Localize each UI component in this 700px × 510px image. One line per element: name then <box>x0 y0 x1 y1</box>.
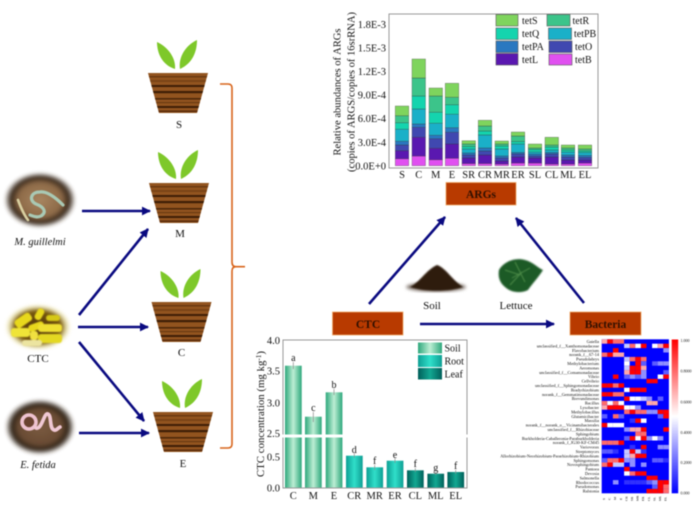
icon: M. guillelmi earthworm photo <box>4 172 76 228</box>
legend: Leaf <box>444 370 463 380</box>
column labels: MR <box>636 495 640 501</box>
x axis labels: CR <box>347 491 361 502</box>
significance letters: f <box>373 456 377 467</box>
colour scale bar: 0.8000 <box>680 368 692 374</box>
x axis labels: MR <box>494 170 510 181</box>
row labels: Pseudomonas <box>575 484 599 489</box>
chart: bacteria heatmap <box>500 338 692 501</box>
x axis labels <box>290 491 462 502</box>
legend: Soil <box>444 344 461 354</box>
column labels: ER <box>641 496 645 501</box>
row labels: Vibrio <box>588 374 599 379</box>
box: Bacteria: Bacteria <box>585 319 626 331</box>
row labels: Gaiella <box>587 339 599 344</box>
x axis labels: ML <box>560 170 576 181</box>
y axis labels: 0.5 <box>267 452 280 464</box>
row labels: norank_f__Gemmatimonadaceae <box>542 392 599 397</box>
row labels: Flavobacterium <box>572 348 600 353</box>
y axis title: ) <box>256 350 267 355</box>
legend: tetL <box>522 55 538 66</box>
arrow: CTC to pot C <box>78 326 148 328</box>
significance letters <box>291 353 458 474</box>
row labels: Variovorax <box>580 445 600 450</box>
arrow: CTC to ARGs <box>369 217 445 304</box>
axes frame <box>283 340 467 488</box>
row labels: Allorhizobium-Neorhizobium-Pararhizobium-Rhizobium <box>500 453 600 458</box>
row labels <box>500 339 600 494</box>
heatmap cells <box>602 339 669 493</box>
plot frame <box>389 14 598 168</box>
x axis labels: E <box>331 491 337 502</box>
row labels: Ralstonia <box>583 489 599 494</box>
x axis labels: E <box>449 170 455 181</box>
row labels: unclassified_f__Sphingomonadaceae <box>535 383 599 388</box>
y axis labels: 0.0E+0 <box>355 162 386 172</box>
x axis labels: S <box>399 170 405 181</box>
y axis title: CTC concentration (mg kg <box>256 364 267 477</box>
x axis labels: C <box>415 170 422 181</box>
box: ARGs: ARGs <box>466 189 497 201</box>
row labels: Methylobacillus <box>571 409 599 414</box>
column labels: CR <box>624 496 628 501</box>
row labels: Aeromonas <box>579 365 599 370</box>
stacked bars <box>395 59 592 166</box>
icon: E. fetida earthworm photo <box>5 399 75 455</box>
legend: tetQ <box>522 29 540 40</box>
box: Bacteria <box>570 312 641 335</box>
label: CTC: CTC <box>27 353 49 365</box>
y axis labels: 3.0E-4 <box>358 138 387 149</box>
legend: Root <box>444 356 464 368</box>
row labels: Cellvibrio <box>582 379 599 384</box>
row labels: Bradyrhizobium <box>571 387 600 392</box>
row labels: unclassified_f__Rhizobiaceae <box>547 427 599 432</box>
legend: tetS <box>522 16 538 27</box>
y axis title: Relative abundances of ARGs <box>332 28 344 156</box>
error bars <box>293 362 456 475</box>
x axis labels: CR <box>478 170 492 181</box>
x axis labels: ER <box>511 170 525 181</box>
row labels: Burkholderia-Caballeronia-Paraburkholderia <box>522 436 599 441</box>
label: S: S <box>176 119 182 131</box>
y axis labels: 3.5 <box>267 366 280 378</box>
row labels: Streptomyces <box>576 449 599 454</box>
row labels: Rhodococcus <box>576 480 599 485</box>
icon: plant pot E <box>153 379 213 452</box>
column labels <box>602 495 668 501</box>
row labels: Glutamicibacter <box>571 414 600 419</box>
x axis labels: C <box>290 491 297 502</box>
label: C: C <box>178 347 185 359</box>
y axis title <box>332 12 358 172</box>
icon: lettuce <box>499 259 543 292</box>
arrow: CTC to pot M <box>79 229 148 315</box>
column labels: SL <box>652 497 656 501</box>
row labels: Salmonella <box>580 475 599 480</box>
column labels: C <box>608 497 612 500</box>
column labels: CL <box>647 497 651 501</box>
colour scale bar: 0.000 <box>680 490 690 496</box>
significance letters: d <box>352 445 357 456</box>
row labels: Methylobacterium <box>567 361 600 366</box>
y axis labels: 0.0 <box>267 484 280 494</box>
x axis labels: CL <box>409 491 422 502</box>
row labels: Sphingobium <box>576 431 600 436</box>
legend: tetR <box>572 16 589 27</box>
label: Soil: Soil <box>423 300 441 312</box>
legend: tetPA <box>522 42 545 53</box>
row labels: unclassified_f__Xanthomonadaceae <box>537 343 599 348</box>
column labels: SR <box>630 496 634 501</box>
x axis labels: M <box>431 170 441 181</box>
significance letters: g <box>433 463 438 474</box>
column labels: ML <box>658 496 662 501</box>
label: E: E <box>180 458 187 470</box>
y axis labels: 1.8E-3 <box>358 20 386 31</box>
row labels: norank_f__67-14 <box>569 352 600 357</box>
row labels: Lysobacter <box>580 405 600 410</box>
arrow: E. fetida to pot E <box>79 432 149 434</box>
y axis labels: 3.0 <box>267 398 280 410</box>
label: M. guillelmi: M. guillelmi <box>13 237 66 248</box>
significance letters: a <box>291 353 296 364</box>
colour scale bar: 0.4000 <box>680 430 692 435</box>
row labels: Massilia <box>584 418 599 423</box>
row labels: Sphingomonas <box>573 458 599 463</box>
legend: tetO <box>575 42 592 53</box>
box: CTC: CTC <box>356 319 380 331</box>
x axis labels <box>399 170 591 181</box>
significance letters: b <box>332 380 336 391</box>
label: Lettuce: Lettuce <box>500 300 533 312</box>
x axis labels: MR <box>367 491 383 502</box>
column labels: E <box>619 498 623 500</box>
colour scale bar: 1.000 <box>680 338 690 343</box>
chart: ARGs stacked bars <box>332 12 598 181</box>
x axis labels: SL <box>529 170 541 181</box>
row labels: Pantoea <box>585 467 599 472</box>
y axis title: -1 <box>255 354 263 361</box>
icon: CTC capsules photo <box>5 304 71 350</box>
icon: plant pot M <box>149 150 209 223</box>
x axis labels: EL <box>579 170 591 181</box>
significance letters: f <box>454 461 458 472</box>
arrow: CTC to Bacteria <box>420 323 554 325</box>
bracket <box>220 84 245 448</box>
y axis labels: 9.0E-4 <box>358 90 387 102</box>
arrow: Bacteria to ARGs <box>516 218 584 303</box>
x axis labels: ER <box>388 491 402 502</box>
bars <box>285 366 464 488</box>
x axis labels: M <box>309 491 319 502</box>
icon: plant pot C <box>152 269 212 342</box>
significance letters: c <box>311 403 316 414</box>
y axis labels: 1.2E-3 <box>358 67 386 78</box>
box: ARGs <box>446 182 516 205</box>
box: CTC <box>332 312 403 335</box>
y axis labels: 1.5E-3 <box>358 44 386 54</box>
row labels: Novosphingobium <box>567 462 600 467</box>
y axis labels: 4.0 <box>267 336 280 347</box>
row labels: Devosia <box>585 471 599 476</box>
legend <box>496 14 597 66</box>
y axis labels: 6.0E-4 <box>358 114 387 125</box>
y axis labels: 2.5 <box>267 429 280 440</box>
colour scale bar: 0.6000 <box>680 400 692 404</box>
legend: tetB <box>575 55 592 66</box>
row labels: Pseudolabrys <box>576 357 599 362</box>
row labels: Bacillus <box>585 401 599 406</box>
arrow: M. guillelmi to pot M <box>82 210 150 212</box>
axis break <box>279 434 469 438</box>
label: E. fetida: E. fetida <box>19 460 56 471</box>
legend <box>418 342 464 380</box>
significance letters: f <box>414 459 418 470</box>
label: M: M <box>175 228 185 240</box>
chart: CTC concentration bars <box>255 336 469 502</box>
x axis labels: CL <box>545 170 558 181</box>
y axis labels <box>355 20 387 172</box>
arrow: CTC to pot E <box>79 342 144 421</box>
column labels: M <box>613 496 617 500</box>
row labels: unclassified_f__Comamonadaceae <box>539 370 599 375</box>
significance letters: e <box>393 450 398 461</box>
x axis labels: ML <box>428 491 444 502</box>
column labels: EL <box>664 497 668 501</box>
icon: plant pot S <box>148 40 208 113</box>
colour scale bar <box>672 338 692 496</box>
row labels: Brevundimonas <box>572 396 599 401</box>
legend: tetPB <box>574 29 597 40</box>
y axis title: (copies of ARGS/copies of 16srRNA) <box>346 12 358 172</box>
x axis labels: SR <box>462 170 475 181</box>
icon: soil pile <box>406 265 466 292</box>
colour scale bar: 0.2000 <box>680 460 692 465</box>
row labels: norank_f_JG30-KF-CM45 <box>553 440 599 445</box>
column labels: S <box>602 498 606 500</box>
row labels: norank_f__norank_o__Vicinamibacterales <box>526 423 599 428</box>
x axis labels: EL <box>449 491 462 502</box>
y axis labels <box>267 336 280 494</box>
